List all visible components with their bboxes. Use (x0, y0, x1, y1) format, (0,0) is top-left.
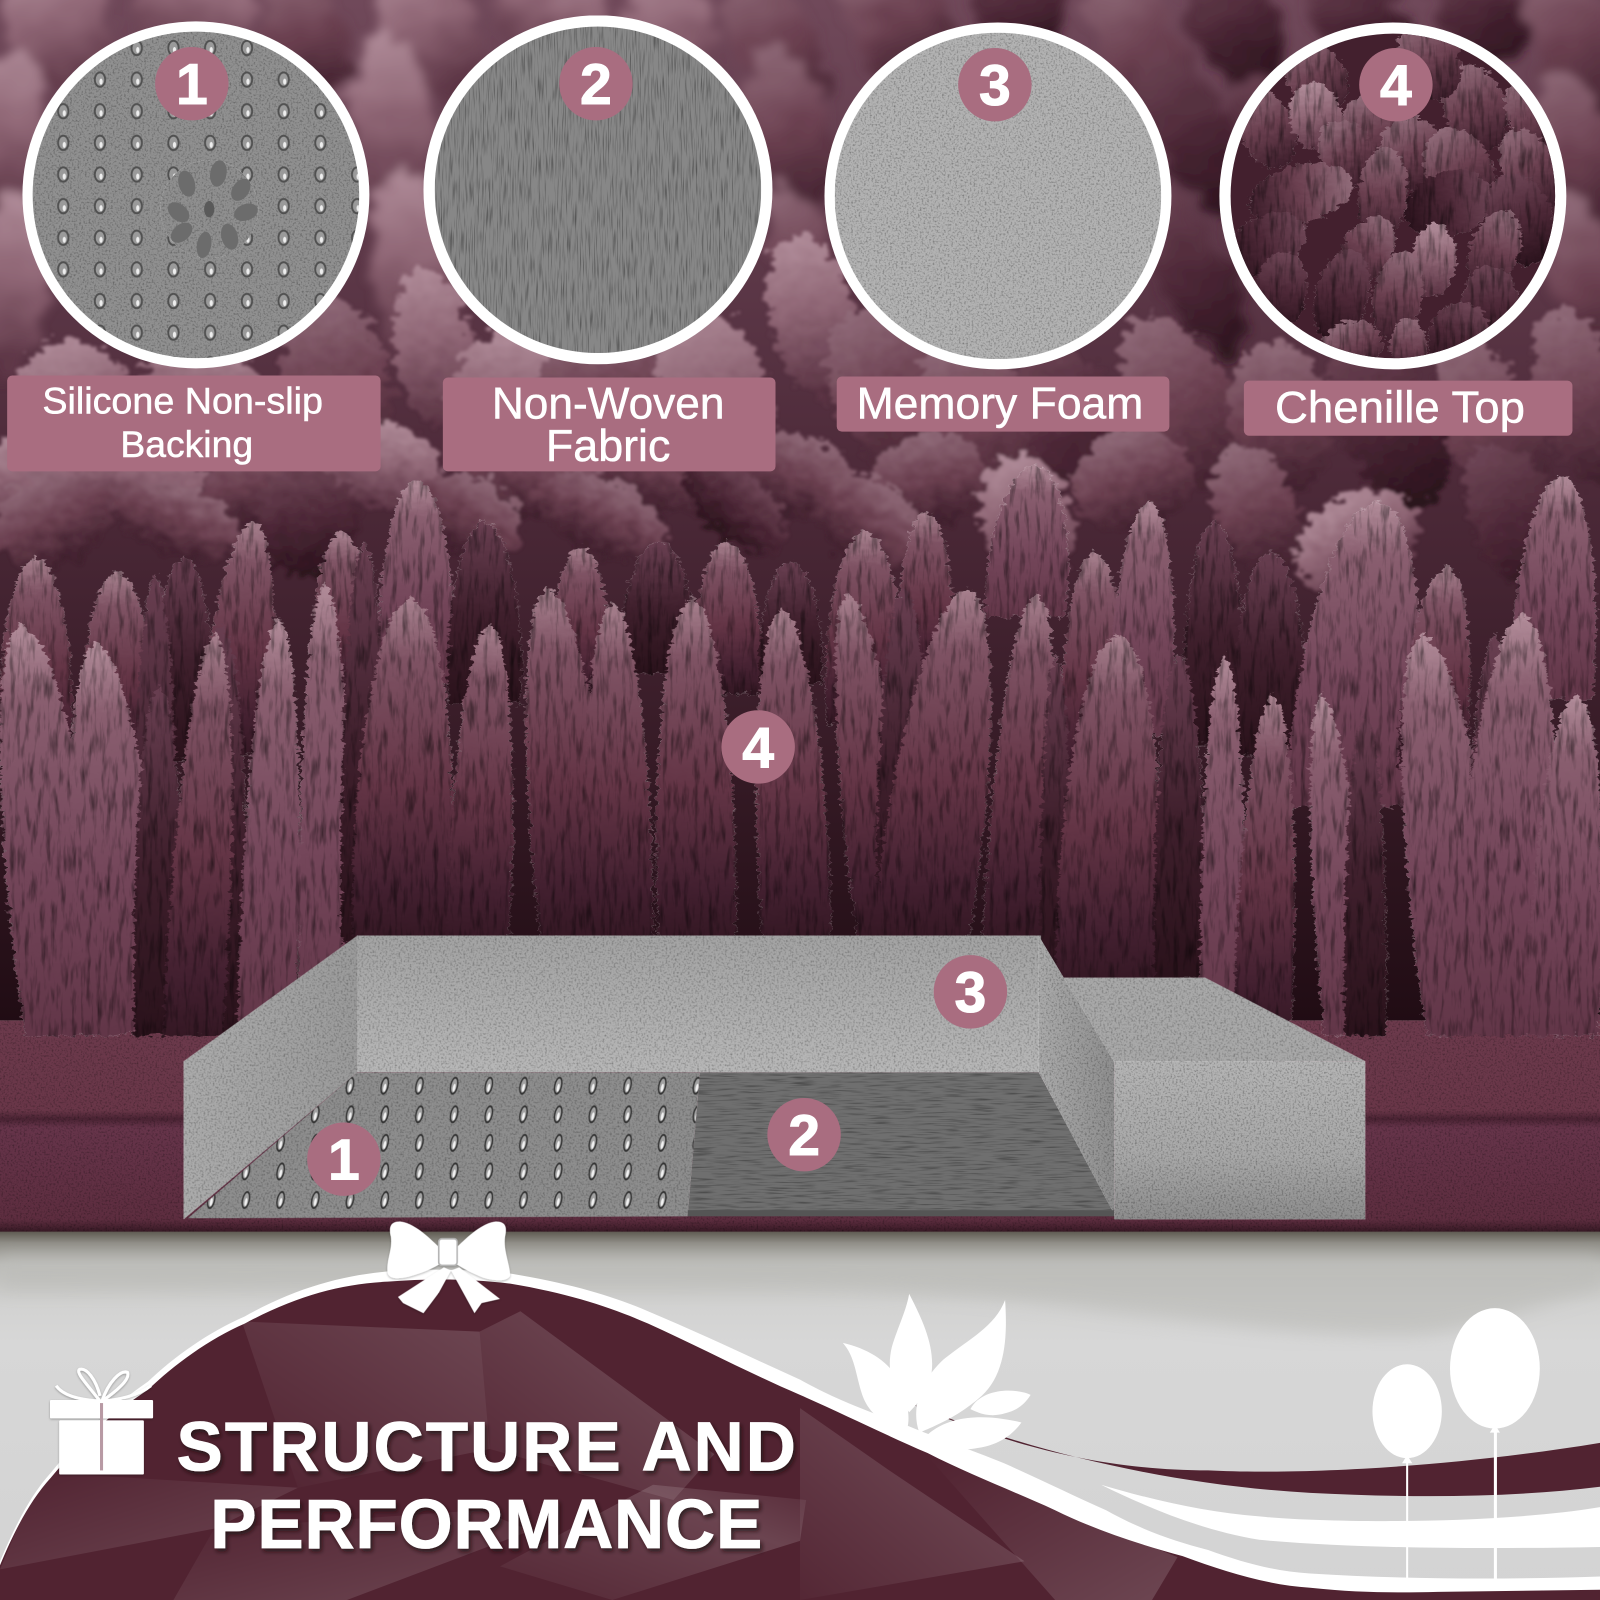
cutaway badge 3 (934, 955, 1007, 1029)
icon: bow (387, 1221, 510, 1313)
label: memory foam: Memory Foam (857, 377, 1143, 428)
dark ribbon (902, 1400, 1600, 1496)
title (177, 1407, 796, 1563)
cutaway badge 1: 1 (328, 1129, 360, 1193)
label: silicone non-slip backing: Backing (120, 424, 253, 465)
label: non-woven fabric: Non-Woven (492, 377, 724, 428)
cutaway badge 1 (307, 1122, 381, 1196)
cutaway badge 2 (767, 1098, 841, 1171)
cutaway badge 4: 4 (742, 716, 774, 780)
label: non-woven fabric: Fabric (546, 420, 670, 471)
non-woven fabric floor (688, 1072, 1114, 1214)
cutaway badge 4 (721, 710, 795, 784)
label: non-woven fabric (443, 377, 776, 471)
white ribbon (1101, 1485, 1600, 1548)
badge 1 (155, 47, 229, 120)
chenille pile, standing strands (0, 464, 1600, 1036)
icon: leaves (843, 1294, 1031, 1449)
dark facet swoosh panel with white edge (0, 1270, 1600, 1600)
label: chenille top (1244, 381, 1572, 436)
panel: detail circle 2 non-woven fabric (423, 15, 772, 364)
foam back wall (357, 936, 1041, 1072)
panel facets (0, 1311, 1178, 1600)
title: STRUCTURE AND (177, 1407, 796, 1485)
foam left wall (184, 936, 357, 1219)
icon: balloons (1372, 1308, 1540, 1589)
foam right inner wall (1039, 936, 1114, 1216)
badge 3 (958, 48, 1032, 121)
panel: detail circle 1 silicone backing (22, 21, 369, 368)
label: silicone non-slip backing (7, 376, 381, 471)
panel: detail circle 3 memory foam (824, 22, 1171, 369)
label: chenille top: Chenille Top (1275, 381, 1525, 432)
badge 2 (559, 47, 633, 120)
badge 1: 1 (176, 53, 208, 117)
bottom wave decoration (0, 1270, 1600, 1600)
foam cutaway block (184, 936, 1365, 1219)
badge 4 (1359, 48, 1433, 121)
foam right step top (1059, 978, 1365, 1062)
badge 4: 4 (1380, 54, 1412, 118)
title: PERFORMANCE (210, 1485, 762, 1563)
cutaway badge 2: 2 (788, 1104, 820, 1168)
badge 3: 3 (979, 54, 1011, 118)
cutaway badge 3: 3 (955, 961, 986, 1025)
label: silicone non-slip backing: Silicone Non-slip (42, 380, 323, 421)
foam right step front (1114, 1061, 1365, 1219)
chenille background, blurred upper pile (0, 0, 1600, 1061)
icon: gift box (50, 1369, 153, 1474)
woven backing band of the rug (0, 1020, 1600, 1235)
panel: detail circle 4 chenille top (1219, 22, 1566, 370)
silicone dotted floor (184, 1071, 704, 1219)
floor surface with shadow (0, 1232, 1600, 1600)
badge 2: 2 (580, 53, 612, 117)
